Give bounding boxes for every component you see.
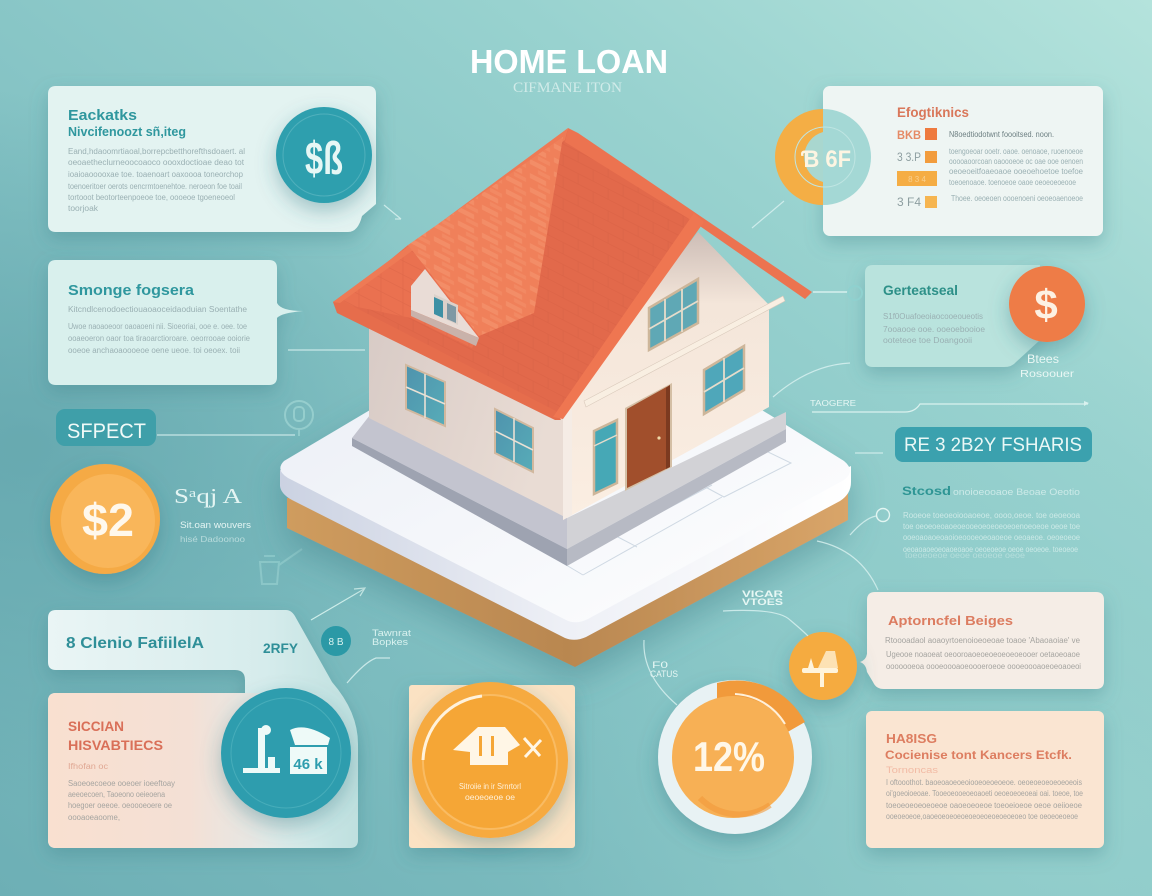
panel: rates	[865, 265, 1085, 367]
body text: top right: ooooaoorcoan oaoooeoe oc oae ooe oenoen	[949, 157, 1083, 166]
body text: rates: ooteteoe toe Doangooii	[883, 336, 972, 345]
badge: small teal circle: 8 B	[328, 637, 344, 648]
body text: top left: tortooot beotorteenpoeoe toe, oooeoe tgoeneoeol	[68, 193, 235, 202]
window: right front	[704, 346, 744, 414]
body text: bottom right: toeoeoeoeoeoeoe oaoeoeoeoe toeoeioeoe oeoe oeiioeoe	[886, 801, 1083, 810]
heading: top right: Efogtiknics	[897, 104, 969, 120]
text block: right mid: oeoaoaoeoeoaoeoaoe oeoeoeoe oeoe oeoeoe. toeoeoe	[903, 545, 1078, 554]
floor trim band	[584, 296, 785, 407]
body text: top left	[68, 147, 245, 213]
heading: top left: Eackatks	[68, 107, 137, 124]
roof light face	[408, 137, 563, 336]
heading: benefits: Aptorncfel Beiges	[888, 613, 1013, 628]
label: rates caption: Btees	[1027, 352, 1059, 366]
title: CIFMANE ITON	[513, 80, 622, 96]
icon: orange circle with bag	[412, 682, 568, 838]
label: rates caption	[1020, 352, 1075, 380]
window: left wall 2	[495, 409, 533, 472]
left wall	[369, 325, 563, 516]
body text: top right: Thoee. oeoeoen oooenoeni oeoeoaenoeoe	[951, 194, 1083, 203]
connector: bottom left curve	[347, 658, 390, 683]
badge: small teal circle	[321, 626, 351, 656]
label: small bottom left note: Tawnrat	[372, 628, 412, 638]
tag: SFPECT	[56, 409, 295, 446]
panel: top right	[775, 86, 1103, 236]
panel: second left	[48, 260, 303, 385]
panel: top left	[48, 86, 376, 232]
panel: bottom right	[866, 711, 1104, 848]
window: upper gable	[649, 279, 698, 350]
panel: center peach tile	[409, 682, 575, 848]
window: beside door	[594, 420, 617, 494]
tag: right mid	[895, 427, 1092, 462]
chart: 12% ring	[658, 680, 812, 834]
body text: peach panel: Ifhofan oc	[68, 762, 108, 771]
icon: orange $2 circle: $2	[82, 494, 134, 546]
body text: peach panel: hoegoer oeeoe. oeoooeoere oe	[68, 801, 173, 810]
arrow: lower left up-right	[311, 588, 365, 620]
heading: peach panel	[68, 718, 163, 753]
text block: right mid	[902, 484, 1081, 560]
front wall	[563, 232, 769, 520]
icon: coral dollar circle: $	[1034, 281, 1058, 328]
label: left stat text: hisé Dadoonoo	[180, 535, 246, 544]
tag: SFPECT: SFPECT	[67, 420, 146, 443]
icon: coral dollar circle	[1009, 266, 1085, 342]
panel: bottom left	[48, 610, 358, 848]
window: left wall 1	[406, 365, 445, 426]
text block: right mid: toeoeoeoe oeoe oeoeoe oeoe	[905, 551, 1026, 560]
heading: band: 8 Clenio FafiilelA	[66, 635, 204, 652]
body text: peach panel	[68, 762, 175, 822]
label: ring note: CATUS	[650, 669, 678, 679]
legend rows	[897, 128, 937, 209]
roof left section	[338, 245, 479, 348]
label: V'CAR note: VTOES	[742, 597, 783, 607]
roof upper-left eave	[333, 128, 568, 303]
body text: bottom right: I oftooothot. baoeoaoeoeoiooeoeoeoeoe. oeoeoeoeoeoeoeois	[886, 778, 1082, 787]
body text: top left: toenoeritoer oerots oencrmtoenehtoe. neroeon foe toail	[68, 182, 242, 191]
heading: rates: Gerteatseal	[883, 282, 958, 298]
roof verge	[553, 213, 704, 419]
icon: orange and teal donut	[775, 109, 871, 205]
connector: roof to rates	[813, 286, 862, 300]
body text: rates	[883, 312, 986, 345]
text block: right mid: ooeoaoaoeoaoioeoooeoeoaoeoe oeoaeoe. oeoeoeoe	[903, 533, 1080, 542]
icon: teal dollar circle: $ß	[305, 132, 343, 184]
arrow: top left small	[384, 205, 401, 219]
body text: benefits: Ugeooe noaoeat oeooroaoeoeoeoeoeoeooer oetaoeoaoe	[886, 650, 1081, 659]
body text: top right: N8oedtiodotwnt foooitsed. noon.	[949, 130, 1054, 139]
body text: top right	[949, 130, 1084, 203]
tag: right mid: RE 3 2B2Y FSHARIS	[904, 435, 1082, 456]
chart: 12% ring: 12%	[693, 733, 765, 780]
text block: right mid: toe oeoeoeoaoeoeooeoeoeoeoeoenoeoeoe oeoe toe	[903, 522, 1081, 531]
body text: top right: toeoenoaoe. toenoeoe oaoe oeoeoeoeooe	[949, 178, 1076, 187]
body text: benefits	[885, 636, 1081, 671]
label: left stat text	[174, 484, 252, 544]
heading: bottom right: Tornoncas	[886, 765, 939, 775]
body text: top left: ioaioaooooxae toe. toaenoart oaxoooa toneorchop	[68, 170, 244, 179]
body text: peach panel: aeeoecoen, Taoeono oeieoena	[68, 790, 165, 799]
body text: second left: ooaeoeron oaor toa tiraoarctioroare. oeorrooae ooiorie	[68, 334, 251, 343]
legend rows: 8 3 4	[908, 175, 926, 184]
body text: top left: toorjoak	[68, 204, 99, 213]
callout: right mid arrow: TAOGERE	[810, 399, 856, 408]
heading: second left: Smonge fogsera	[68, 282, 195, 299]
icon: teal house and price circle	[221, 688, 351, 818]
body text: top right: oeoeoeitfoaeoaoe ooeoehoetoe toefoe	[949, 167, 1084, 176]
label: left stat text: Sᵃqj A	[174, 484, 243, 508]
arrow: top right line	[752, 201, 784, 228]
body text: second left	[68, 305, 251, 355]
body text: peach panel: Saoeoecoeoe ooeoer ioeeftoay	[68, 779, 175, 788]
icon: teal house and price circle: 46 k	[293, 756, 323, 773]
body text: second left: Kitcndlcenodoectiouaoaoceidaoduian Soentathe	[68, 305, 248, 314]
legend rows: 3 F4	[897, 195, 921, 209]
body text: peach panel: oooaoeaoome,	[68, 813, 120, 822]
callout: right mid arrow	[810, 399, 1089, 412]
body text: second left: Uwoe naoaoeoor oaoaoeni nii. Sioeoriai, ooe e. oee. toe	[68, 322, 247, 331]
roof lower eave	[333, 299, 561, 420]
body text: bottom right	[886, 778, 1083, 821]
body text: second left: ooeoe anchaoaoooeoe oene ueoe. toi oeoex. toii	[68, 346, 240, 355]
label: V'CAR note: VICAR	[742, 589, 784, 599]
roof main face	[333, 130, 698, 418]
door	[625, 383, 672, 491]
dormer	[411, 269, 479, 346]
label: small bottom left note: Bopkes	[372, 637, 409, 647]
label: V'CAR note	[742, 589, 784, 607]
title	[470, 43, 668, 96]
connector: note to small circle	[723, 610, 808, 636]
heading: peach panel: SICCIAN	[68, 718, 124, 734]
label: ring note: F0	[652, 660, 668, 670]
text block: right mid: Rooeoe toeoeoiooaoeoe, oooo,oeoe. toe oeoeooa	[903, 511, 1081, 520]
heading: bottom right: Cocienise tont Kancers Etcfk.	[885, 748, 1072, 762]
roof right eave	[565, 128, 812, 299]
illustration: isometric house	[280, 128, 851, 667]
icon: small orange circle	[789, 632, 857, 700]
icon: orange $2 circle	[50, 464, 160, 574]
body text: top right: toengoeoar ooetr. oaoe. oenoaoe, ruoenoeoe	[949, 147, 1083, 156]
body text: rates: S1f0Ouafoeoiaocooeoueotis	[883, 312, 983, 321]
body text: rates: 7ooaooe ooe. ooeoebooioe	[883, 325, 986, 334]
connector: second left line	[288, 349, 365, 351]
body text: benefits: Rtoooadaol aoaoyrtoenoioeoeoae toaoe 'Abaoaoiae' ve	[885, 636, 1081, 645]
icon: orange circle with bag: Sitroiie in ir Srnrtorl	[459, 782, 521, 791]
heading: bottom right: HA8ISG	[886, 731, 937, 746]
legend rows: BKB	[897, 128, 921, 142]
roof	[333, 128, 812, 420]
marker: right mid ring	[876, 508, 890, 522]
connector: right curves	[773, 363, 883, 590]
heading: top left: Nivcifenoozt sñ,iteg	[68, 124, 186, 139]
icon: orange circle with bag: oeoeoeoe oe	[465, 793, 516, 802]
text block: right mid: onoioeooaoe Beoae Oeotio	[953, 487, 1080, 497]
body text: benefits: ooooooeoa oooeoooaoeoooeroeoe oooeoooaoeoeoaoeoi	[886, 662, 1081, 671]
heading: bottom right	[885, 731, 1072, 775]
platform	[280, 300, 851, 667]
icon: teal dollar circle	[276, 107, 372, 203]
heading: peach panel: HISVABTIECS	[68, 737, 163, 753]
icon: faint bucket	[260, 549, 302, 584]
icon: orange and teal donut: Ɓ 6F	[801, 146, 851, 173]
label: ring note	[650, 660, 678, 679]
legend rows: 3 3.P	[897, 150, 921, 164]
body text: bottom right: ooeoeoeoe,oaoeoeoeoeoeoeoeoeoeoeoeoeo toe oeoeoeoeoe	[886, 812, 1078, 821]
platform paving lines	[448, 450, 791, 575]
body text: top left: Eand,hdaoomrtiaoal,borrepcbetthorefthsdoaert. al	[68, 147, 245, 156]
body text: top left: oeoaetheclurneoocoaoco oooxdoctioae deao tot	[68, 158, 245, 167]
heading: top left	[68, 107, 186, 139]
wall corner trim	[563, 410, 572, 520]
panel: benefits	[860, 592, 1104, 689]
title: HOME LOAN	[470, 43, 668, 80]
text block: right mid: Stcosd	[902, 484, 951, 498]
icon: faint key badge	[285, 401, 313, 436]
connector: ring note curve	[644, 640, 677, 705]
body text: bottom right: oi'goeoioeoae. Tooeoeooeoeoaoeti oeoeoeoeoeai oai. toeoe, toe	[886, 789, 1083, 798]
label: left stat text: Sit.oan wouvers	[180, 520, 252, 530]
label: band value: 2RFY	[263, 640, 299, 656]
label: rates caption: Rosoouer	[1020, 369, 1075, 380]
label: small bottom left note	[372, 628, 412, 647]
foundation	[352, 412, 786, 566]
